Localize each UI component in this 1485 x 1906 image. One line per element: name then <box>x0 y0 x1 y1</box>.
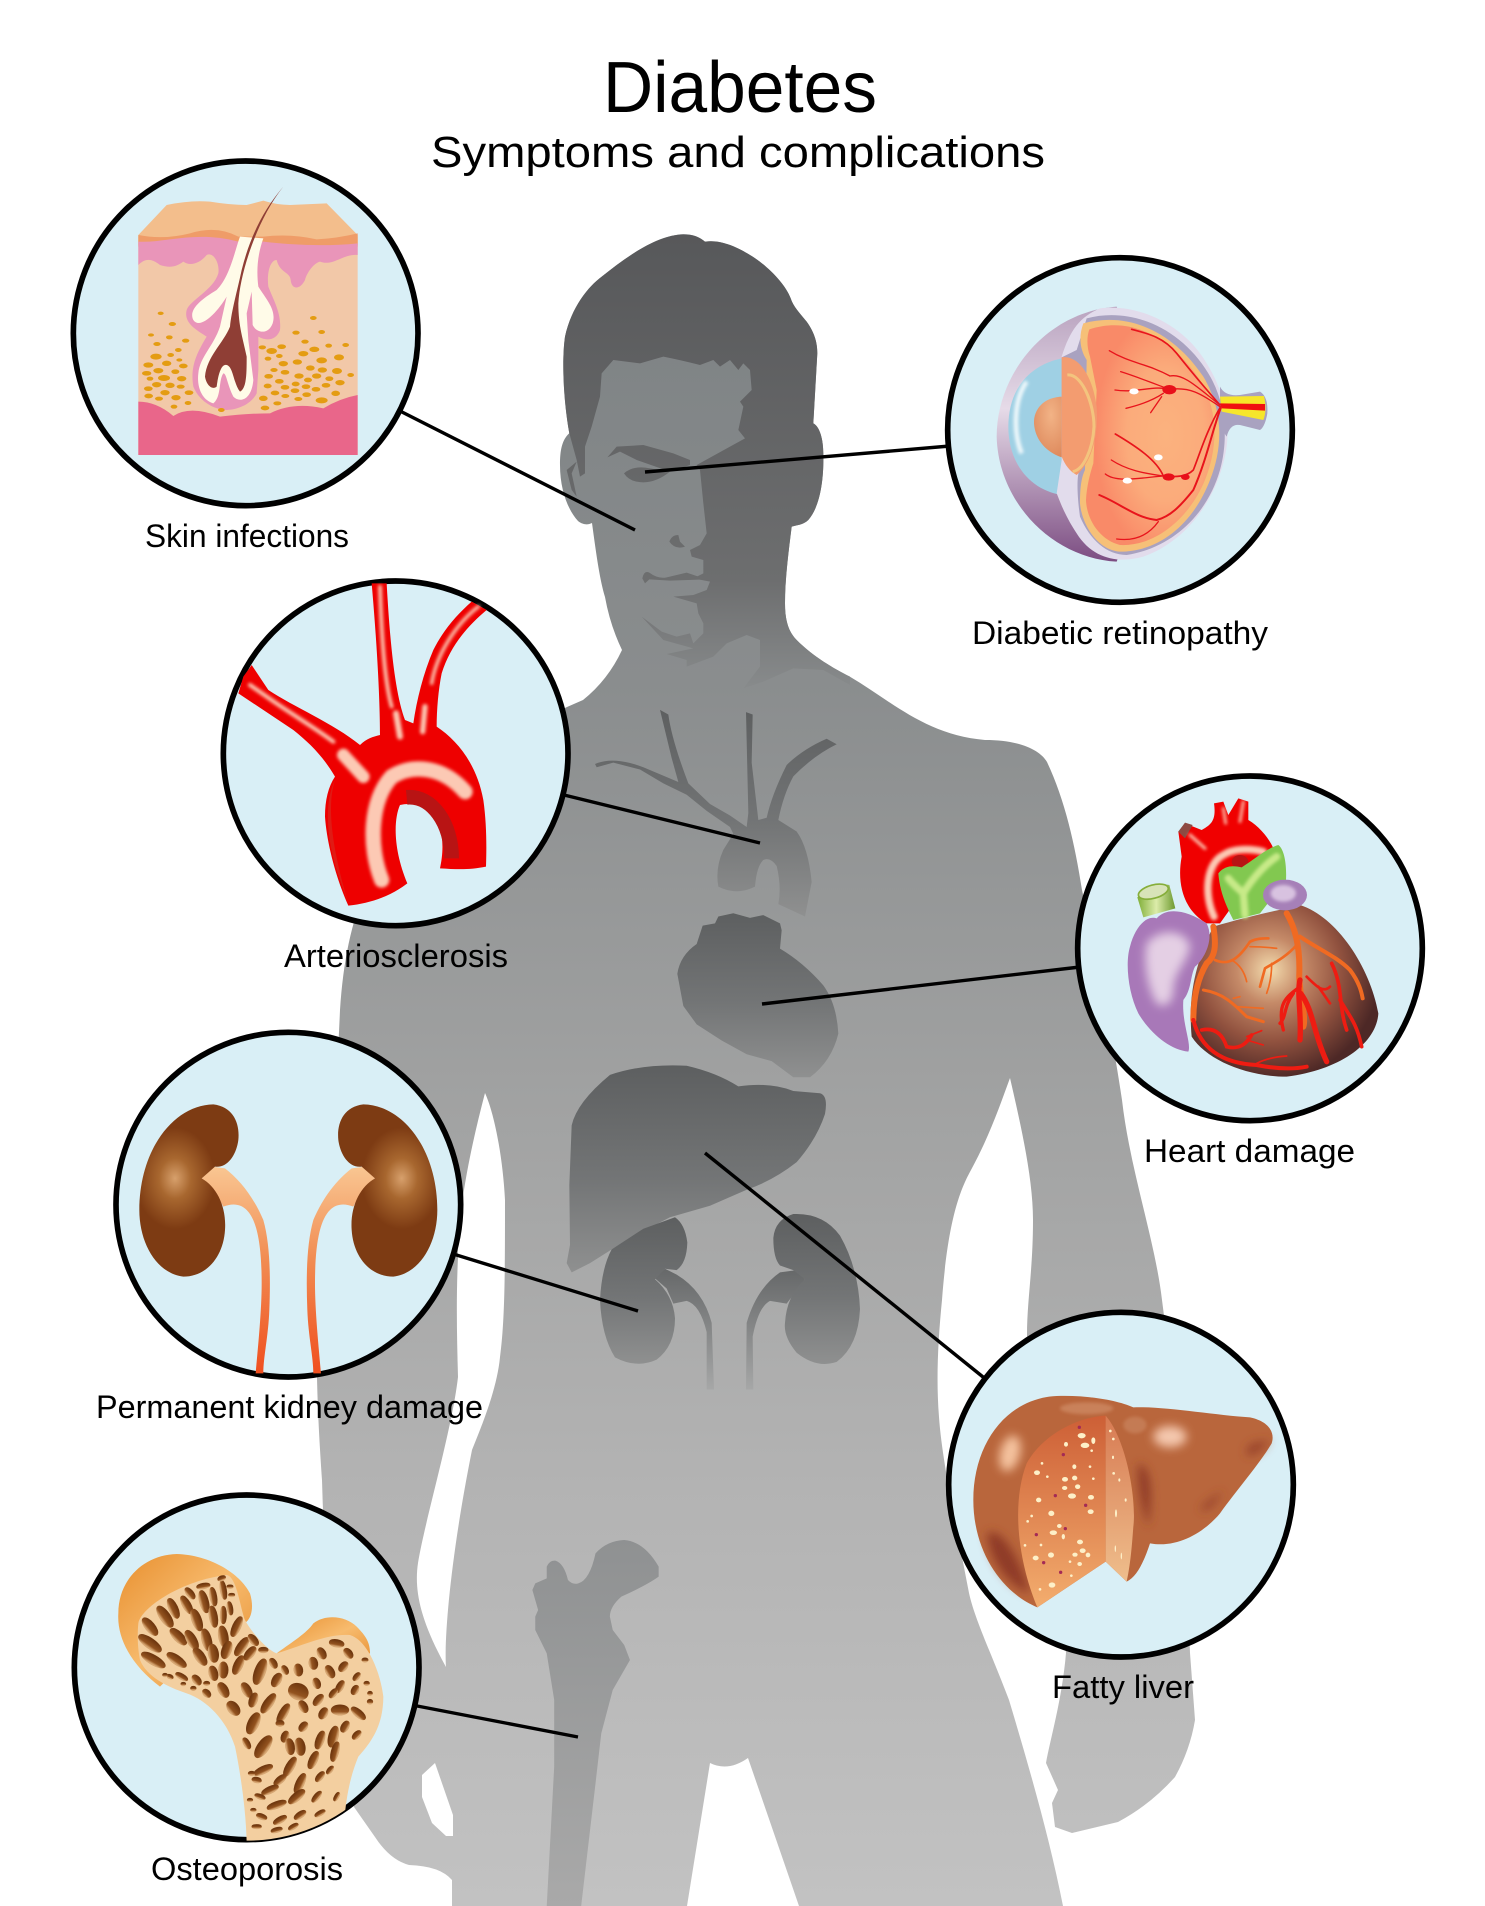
panel: heart damage <box>1078 776 1422 1121</box>
human body silhouette <box>317 234 1195 1906</box>
circle background <box>74 1495 419 1840</box>
circle background <box>116 1032 461 1377</box>
subtitle: Symptoms and complications <box>431 128 1045 177</box>
circle background <box>1078 776 1422 1121</box>
leader: eye <box>645 446 950 472</box>
eye illustration <box>997 307 1267 562</box>
circle background <box>223 581 568 926</box>
liver silhouette <box>567 1065 826 1272</box>
panel: diabetic retinopathy <box>948 258 1292 602</box>
eye <box>624 467 670 482</box>
femur bone illustration <box>118 1554 383 1847</box>
label: fatty liver: Fatty liver <box>1052 1669 1194 1705</box>
heart illustration <box>1128 798 1378 1077</box>
label: osteoporosis: Osteoporosis <box>151 1851 343 1887</box>
label: diabetic retinopathy: Diabetic retinopathy <box>972 615 1268 651</box>
leader: liver <box>705 1153 988 1381</box>
label: permanent kidney damage: Permanent kidney damage <box>96 1389 483 1425</box>
eyebrow <box>607 445 690 472</box>
circle background <box>73 161 418 506</box>
label: heart damage: Heart damage <box>1144 1133 1355 1169</box>
nostril <box>669 535 685 548</box>
panel: osteoporosis <box>74 1495 419 1847</box>
leader: bone <box>412 1705 578 1737</box>
body outline <box>317 234 1195 1906</box>
heart silhouette <box>677 913 838 1077</box>
face shadow and hair <box>563 234 850 688</box>
panel: skin infections <box>73 161 418 506</box>
liver illustration <box>973 1396 1273 1607</box>
leader: arteries <box>560 794 760 843</box>
panel: permanent kidney damage <box>116 1032 461 1377</box>
leader lines <box>400 411 1080 1737</box>
leader: kidney <box>450 1253 638 1311</box>
femur silhouette <box>532 1540 659 1906</box>
title: Diabetes <box>603 48 877 128</box>
kidneys silhouette <box>600 1214 860 1389</box>
title block <box>431 48 1045 177</box>
label: arteriosclerosis: Arteriosclerosis <box>284 938 508 974</box>
label: skin infections: Skin infections <box>145 518 349 554</box>
panel: arteriosclerosis <box>223 581 568 926</box>
panel: fatty liver <box>949 1312 1293 1657</box>
kidneys illustration <box>139 1104 437 1373</box>
circle background <box>948 258 1292 602</box>
circle background <box>949 1312 1293 1657</box>
leader: heart <box>762 967 1080 1004</box>
mouth <box>642 572 707 583</box>
ear detail <box>567 462 577 497</box>
skin illustration <box>138 187 358 455</box>
aorta silhouette <box>595 710 837 916</box>
leader: skin <box>400 411 635 530</box>
aortic arch illustration <box>238 583 487 906</box>
